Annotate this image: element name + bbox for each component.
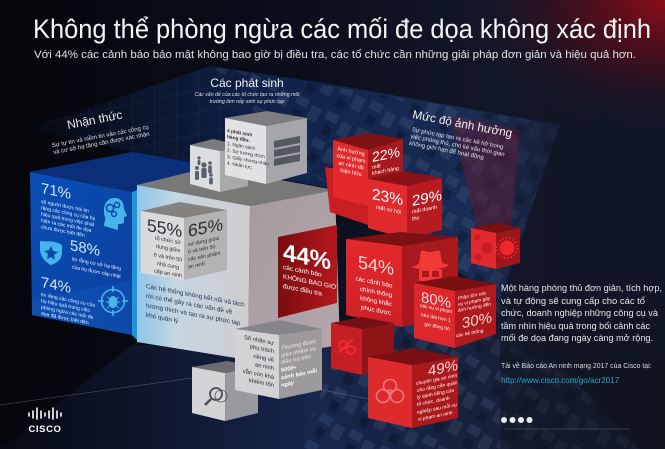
text: impact note: an ninh rất bbox=[338, 160, 364, 172]
stat: 55%: 55% bbox=[147, 215, 182, 241]
icon: virus burst bbox=[497, 238, 517, 258]
heading: Nhận thức: Sự tự tin và niềm tin vào các công cụ bbox=[51, 125, 149, 149]
text: 49% caption: tổ chức, doanh bbox=[417, 394, 450, 408]
cube: top 4 issues bbox=[225, 111, 307, 184]
stat: 23%: 23% bbox=[372, 186, 403, 209]
text: top issues list: 4 phát sinh bbox=[227, 128, 252, 139]
icon: red cross mark bbox=[338, 339, 355, 354]
text: 5000+ alerts: điều tra trên bbox=[281, 354, 311, 366]
heading: Mức độ ảnh hưởng: Sự phức tạp tạo ra các kẽ hở trong bbox=[411, 126, 504, 151]
cube: tangible impact and 22% bbox=[333, 133, 403, 206]
text: 55% caption: tổ chức sử bbox=[155, 235, 181, 246]
text: staffing note: an ninh bbox=[255, 362, 274, 372]
cube: magnifier bbox=[192, 361, 258, 421]
heading: Mức độ ảnh hưởng: việc phòng thủ, cho kẻ xấu thời gian bbox=[410, 133, 505, 158]
stat: 71% bbox=[41, 180, 95, 241]
text: 55% caption: 6 và trên 50 bbox=[154, 252, 182, 264]
panel: large gray cube bbox=[137, 167, 340, 360]
logo: Cisco: CISCO bbox=[28, 424, 62, 435]
text: 80% caption: kéo dài hơn 1 bbox=[421, 312, 451, 324]
icon: bug in crosshair bbox=[98, 286, 128, 316]
icon: magnifying glass bbox=[205, 388, 227, 405]
text: disconnected systems: tương thích và tạo ra sự phức tạp bbox=[146, 302, 241, 327]
text: 55% caption: cấp an ninh bbox=[154, 269, 182, 279]
stat: 44%: được điều tra bbox=[283, 281, 322, 298]
text: 55% caption: nhà cung bbox=[157, 261, 179, 271]
text: impact note: của vi phạm bbox=[336, 152, 366, 165]
stat: 22%: khách hàng bbox=[372, 166, 399, 177]
cube: people icon bbox=[190, 139, 248, 192]
cube: 49% bbox=[368, 348, 458, 428]
icon: virus dots bbox=[474, 234, 492, 260]
text: impact note: hiện hữu bbox=[340, 168, 362, 178]
icons: social media bbox=[501, 417, 532, 423]
cube: 54% bbox=[346, 232, 458, 327]
text: conclusion: chức, doanh nghiệp những công cụ và bbox=[501, 308, 658, 318]
text: impact note bbox=[336, 145, 366, 178]
text: 80% caption: giờ đồng hồ bbox=[424, 321, 450, 333]
stat: 44%: 44% bbox=[283, 239, 331, 276]
stat: 71%: rằng các công cụ của họ bbox=[41, 204, 95, 222]
heading: Mức độ ảnh hưởng: không giới hạn để hoạt động bbox=[408, 140, 484, 161]
stat: 58%: của họ được cập nhật bbox=[72, 263, 121, 280]
stat: 30% bbox=[456, 289, 492, 339]
text: top issues list: 4. Nhân lực bbox=[227, 161, 252, 171]
stat: 49%: 49% bbox=[428, 357, 458, 380]
panel: blue awareness cube bbox=[30, 152, 190, 340]
stat: 22%: 22% bbox=[372, 143, 400, 165]
text: 80% caption: các vụ vi phạm bbox=[420, 303, 452, 315]
stat: 22%: mất bbox=[372, 163, 381, 171]
stat: 71%: số người được hỏi tin bbox=[41, 198, 89, 215]
text: conclusion: tầm nhìn hiệu quả trong bối cảnh các bbox=[501, 321, 651, 331]
stat: 44%: KHÔNG BAO GIỜ bbox=[283, 272, 337, 291]
stat: 65%: an ninh bbox=[188, 261, 205, 270]
stat: 71%: hiệu quả trong việc phát bbox=[41, 212, 95, 228]
text: disconnected systems: rời có thể gây ra các vấn đề về bbox=[146, 291, 233, 316]
logo: Cisco bbox=[28, 408, 62, 435]
text: 54% caption: không khắc bbox=[360, 295, 392, 308]
text: 49% caption bbox=[416, 373, 458, 423]
stat: 74%: 74% bbox=[41, 274, 71, 297]
text: 5000+ alerts: Thường được bbox=[281, 339, 316, 352]
stat: 58%: tin rằng cơ sở hạ tầng bbox=[72, 255, 121, 272]
stat: 44% bbox=[283, 239, 337, 301]
red shape behind impact cube bbox=[325, 167, 368, 225]
text: 5000+ alerts: giao nhiệm vụ bbox=[281, 346, 316, 359]
stat: 29%: mất doanh bbox=[412, 205, 437, 215]
text: top issues list: 2. Sự tương thích bbox=[227, 148, 265, 160]
link: report url: http://www.cisco.com/go/acr2017 bbox=[501, 376, 620, 385]
stat: 65%: các sản phẩm bbox=[188, 249, 221, 263]
text: impact note: Ảnh hưởng bbox=[337, 145, 365, 158]
text: staffing note: riêng về bbox=[253, 354, 274, 364]
heading: Các phát sinh: trường làm nảy sinh sự phức tạp bbox=[210, 98, 285, 105]
stat: 71%: hiện ra các mối đe dọa bbox=[41, 218, 92, 234]
stat: 44%: các cảnh báo bbox=[283, 264, 322, 279]
stat: 30%: Phần lớn các bbox=[458, 290, 487, 302]
text: 5000+ alerts: ngày bbox=[281, 380, 295, 389]
text: download note: Tải về Báo cáo An ninh mạng 2017 của Cisco tại: bbox=[501, 361, 652, 370]
icon: hacker in hat bbox=[411, 251, 449, 281]
stat: 65%: 6 và trên 50 bbox=[188, 244, 216, 255]
heading: Mức độ ảnh hưởng: Mức độ ảnh hưởng bbox=[411, 108, 513, 140]
stat: 74%: phòng ngừa các mối đe bbox=[41, 305, 94, 321]
stat: 71%: 71% bbox=[41, 180, 71, 203]
text: disconnected systems bbox=[146, 281, 245, 338]
text: 80% caption bbox=[420, 303, 452, 333]
stat: 29% bbox=[412, 187, 442, 222]
text: staffing note: Số nhân sự bbox=[244, 335, 274, 347]
icon: people bbox=[195, 156, 213, 184]
text: 54% caption: các cảnh báo bbox=[356, 275, 393, 290]
icon: shield with star bbox=[40, 241, 62, 265]
text: 49% caption: chuyên gia an ninh bbox=[416, 373, 457, 387]
text: 49% caption: cho rằng cần quản bbox=[417, 379, 458, 394]
text: 54% caption: phục được bbox=[361, 304, 391, 317]
stat: 71%: chưa được biết đến bbox=[41, 224, 85, 239]
text: conclusion: mối đe dọa đang ngày càng mở rộng. bbox=[501, 333, 653, 343]
text: 49% caption: lý danh tiếng của bbox=[417, 387, 454, 401]
stat: 58%: 58% bbox=[70, 237, 100, 260]
stat: 23%: mất cơ hội bbox=[376, 205, 401, 216]
subtitle: Với 44% các cảnh báo bảo mật không bao giờ bị điều tra, các tổ chức cần những giải pháp đơn giản và hiệu quả hơn. bbox=[34, 49, 636, 61]
panel: 44% alerts bbox=[278, 225, 337, 318]
icon: biohazard bbox=[376, 380, 404, 402]
text: disconnected systems: Các hệ thống không kết nối và tách bbox=[146, 281, 245, 309]
text: conclusion: Một hàng phòng thủ đơn giản, tích hợp, bbox=[501, 283, 662, 293]
cube: dark red small bbox=[331, 317, 394, 375]
text: staffing note: phụ trách bbox=[250, 344, 274, 355]
text: disconnected systems: khó quản lý bbox=[146, 312, 179, 325]
stat: 65%: sử dụng giữa bbox=[188, 235, 219, 248]
text: 54% caption bbox=[356, 275, 393, 317]
stat: 30%: vụ vi phạm gây bbox=[458, 295, 491, 308]
stat: 74%: tin rằng các công cụ của bbox=[41, 291, 95, 309]
stat: 58% bbox=[70, 237, 121, 280]
stat: 80%: 80% bbox=[421, 289, 451, 312]
icon: server racks bbox=[274, 136, 300, 166]
stat: 29%: thu bbox=[412, 215, 419, 222]
heading: Mức độ ảnh hưởng bbox=[406, 108, 513, 166]
text: staffing note: khiêm tốn bbox=[249, 378, 274, 389]
text: 49% caption: vi phạm an ninh bbox=[418, 410, 453, 423]
text: 54% caption: chính thống bbox=[360, 286, 393, 299]
text: staffing note: vẫn còn khá bbox=[243, 368, 275, 381]
icon: head with gears bbox=[104, 198, 127, 230]
cube: 23% and 29% bbox=[368, 171, 442, 239]
text: top issues list bbox=[227, 128, 269, 174]
stat: 29%: 29% bbox=[412, 187, 442, 210]
stat: 65%: 65% bbox=[188, 214, 223, 241]
cube: 80% and 30% bbox=[414, 276, 496, 348]
heading: Nhận thức: và cơ sở hạ tầng cần được xác nhận bbox=[53, 131, 150, 156]
text: 49% caption: nghiệp sau mỗi vụ bbox=[417, 401, 457, 416]
stat: 30%: các hệ thống bbox=[456, 328, 484, 339]
text: top issues list: 3. Giấy chứng nhận bbox=[227, 154, 269, 168]
text: 5000+ alerts: 5000+ bbox=[281, 365, 297, 374]
text: 5000+ alerts: cảnh báo mỗi bbox=[281, 367, 317, 381]
stat: 22% bbox=[372, 143, 400, 177]
text: 55% caption: dụng giữa bbox=[156, 244, 181, 254]
heading: Các phát sinh bbox=[195, 76, 300, 105]
text: top issues list: hàng đầu: bbox=[227, 134, 250, 144]
stat: 74%: dọa đã được biết đến bbox=[41, 311, 89, 326]
heading: Các phát sinh: Các phát sinh bbox=[210, 76, 284, 90]
text: staffing note bbox=[243, 335, 275, 389]
stat: 74%: họ hiệu quả trong việc bbox=[41, 298, 91, 314]
stat: 30%: 30% bbox=[462, 309, 492, 332]
stat: 74% bbox=[41, 274, 95, 328]
stat: 65% bbox=[188, 214, 223, 270]
stat: 30%: ảnh hưởng đến bbox=[458, 300, 491, 314]
heading: Các phát sinh: Các vấn đề của các tổ chức tạo ra những môi bbox=[195, 91, 300, 98]
cube: staffing bbox=[235, 320, 322, 399]
text: 5000+ alerts bbox=[281, 339, 317, 389]
stat: 54%: 54% bbox=[358, 252, 394, 279]
text: top issues list: 1. Ngân sách bbox=[227, 141, 256, 152]
text: 55% caption bbox=[154, 235, 182, 279]
cube: 55% and 65% bbox=[141, 202, 227, 280]
text: conclusion bbox=[501, 283, 662, 343]
text: conclusion: và tự động sẽ cung cấp cho các tổ bbox=[501, 296, 645, 306]
heading: Nhận thức: Nhận thức bbox=[66, 108, 123, 132]
cube: virus icons bbox=[471, 223, 520, 269]
heading: Nhận thức bbox=[47, 103, 151, 156]
